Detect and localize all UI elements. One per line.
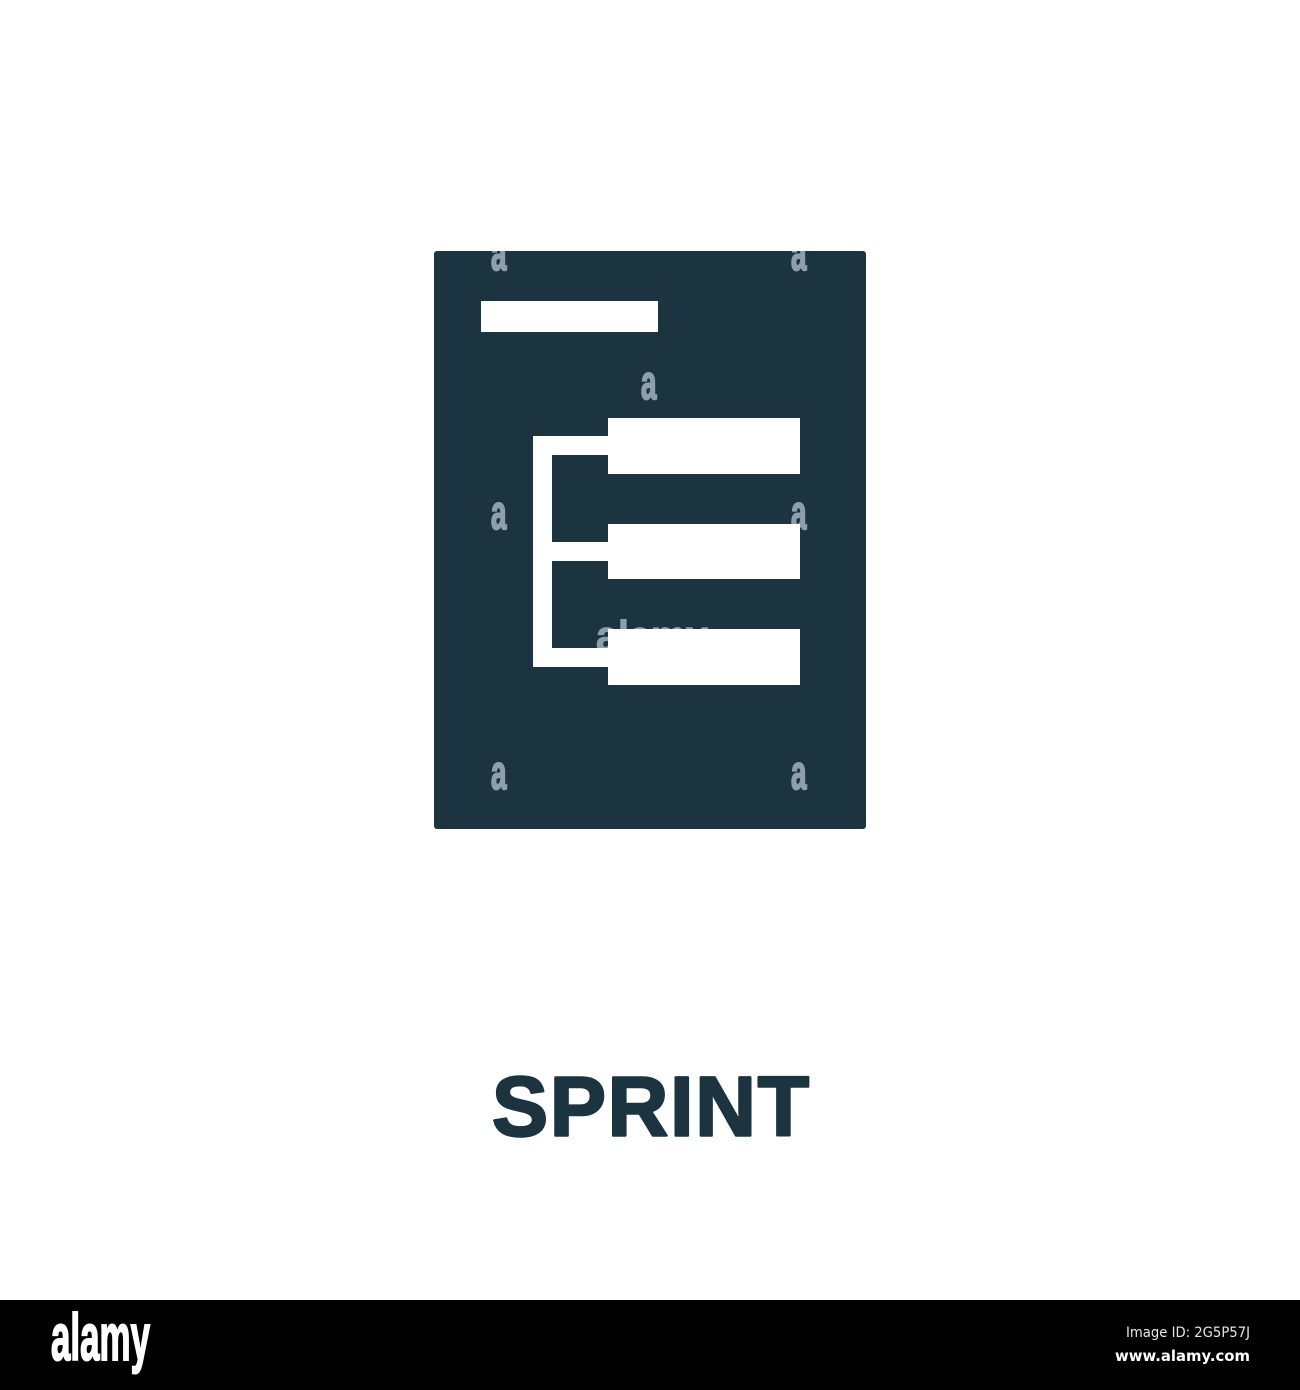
watermark letters: a [791,486,807,540]
task box 1 [608,418,800,474]
watermark letters: alamy [596,612,708,661]
title: SPRINT: SPRINT [492,1060,809,1154]
watermark letters: a [491,746,507,800]
watermark letters: a [791,227,807,281]
icon: sprint document [434,227,866,829]
watermark letters: a [491,486,507,540]
task box 2 [608,524,800,579]
task box 3 [608,629,800,685]
website: www.alamy.com [1115,1347,1250,1365]
image id: Image ID: 2G5P57J [1126,1325,1250,1341]
watermark letters: a [791,746,807,800]
document sheet [434,251,866,829]
footer bar [0,1300,1300,1390]
alamy logo: alamy [51,1300,150,1374]
watermark letters [491,227,807,800]
tree connector [533,436,608,667]
watermark letters: a [641,356,657,410]
watermark letters: a [491,227,507,281]
title bar [481,301,658,332]
